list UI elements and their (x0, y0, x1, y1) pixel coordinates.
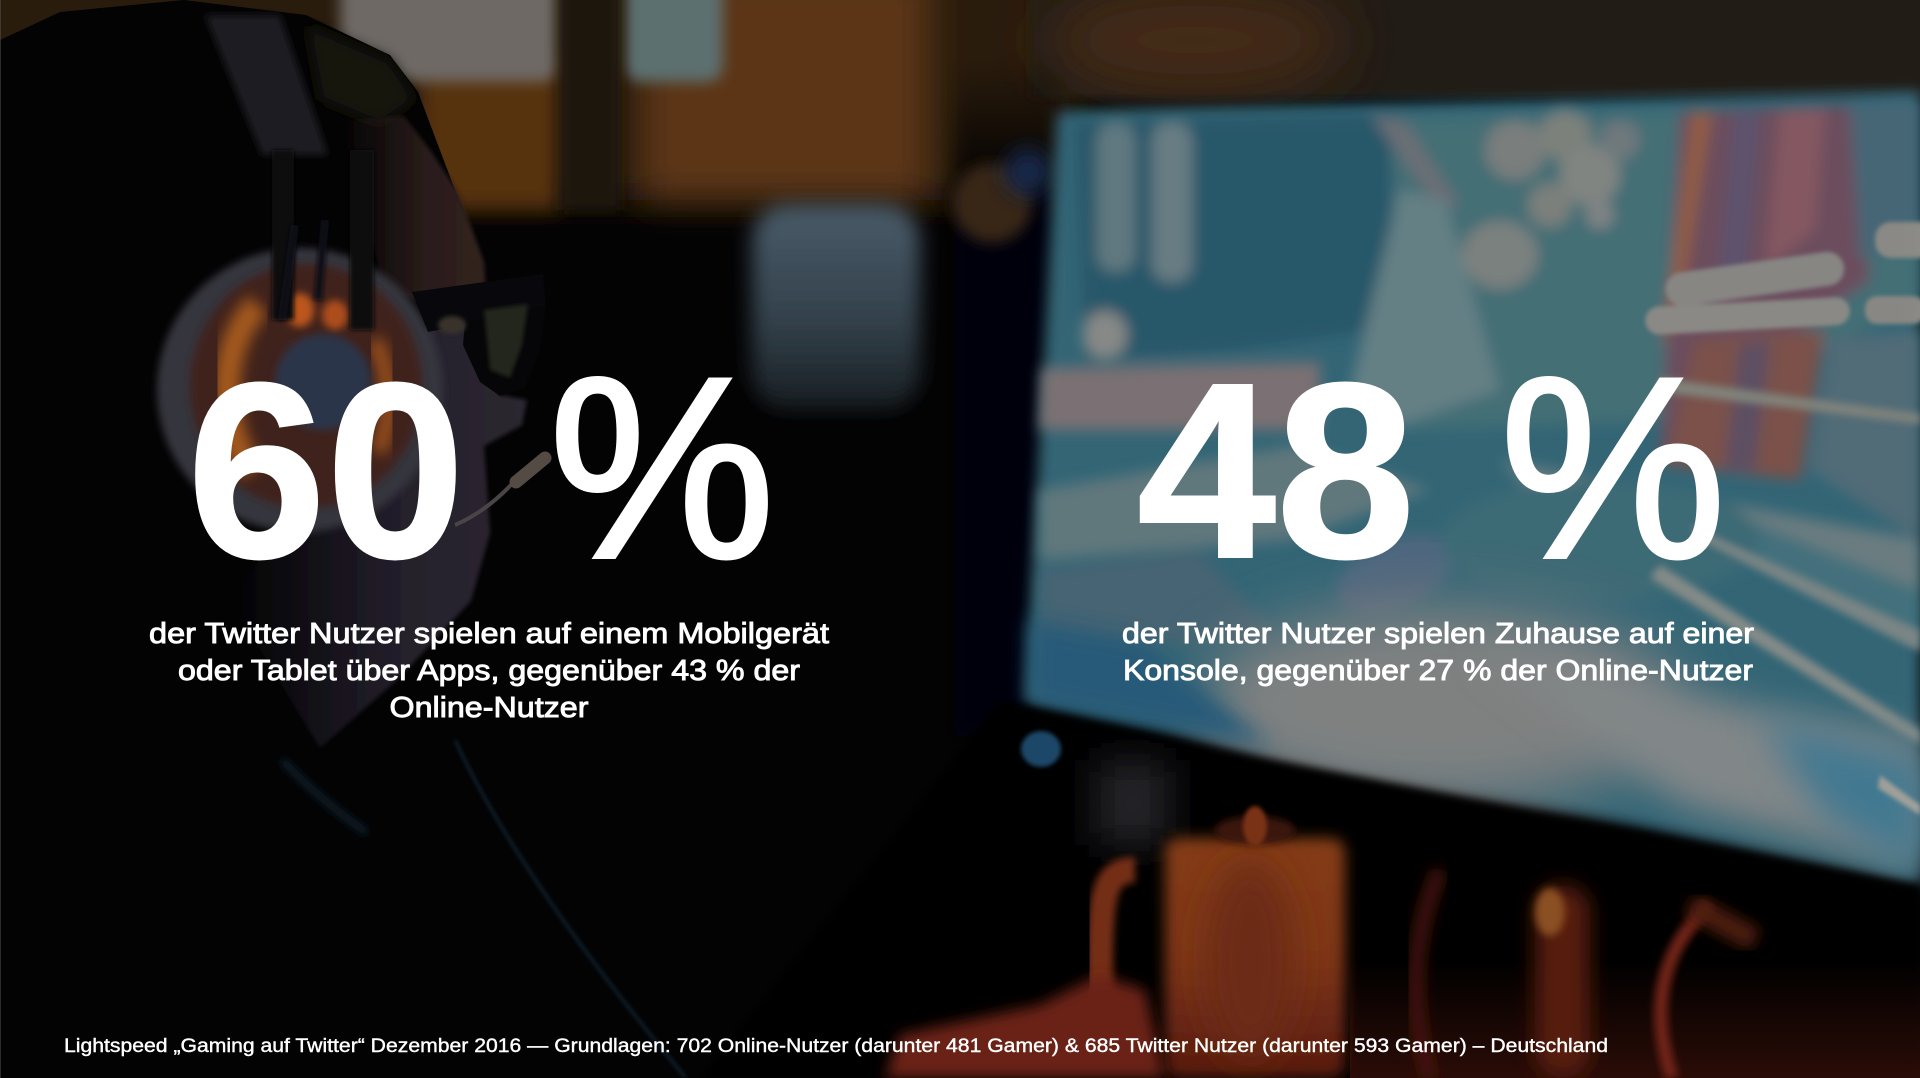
description: 48 %: Konsole, gegenüber 27 % der Online-Nutzer (1123, 655, 1753, 687)
room lights behind the gamer (0, 0, 1920, 740)
source footnote: Lightspeed „Gaming auf Twitter“ Dezember 2016 — Grundlagen: 702 Online-Nutzer (darunter 481 Gamer) & 685 Twitter Nutzer (darunter 593 Gamer) – Deutschland (64, 1035, 1608, 1057)
statistic: 60 % (187, 323, 775, 612)
hair (306, 24, 416, 125)
statistic: 60 %: % (549, 323, 775, 612)
monitor screen (1026, 92, 1920, 882)
description: 48 %: der Twitter Nutzer spielen Zuhause auf einer (1122, 618, 1754, 650)
grey stand detail (1095, 760, 1170, 845)
gamer silhouette (0, 0, 690, 1078)
headphone ear cup with glowing rings (157, 150, 443, 532)
statistic: 48 % (1137, 323, 1726, 612)
statistic: 60 %: 60 (187, 331, 465, 610)
description: 60 % (149, 618, 829, 724)
description: 60 %: Online-Nutzer (390, 692, 589, 724)
description: 60 %: der Twitter Nutzer spielen auf einem Mobilgerät (149, 618, 829, 650)
description: 60 %: oder Tablet über Apps, gegenüber 43 % der (178, 655, 800, 687)
monitor power LED (1021, 731, 1061, 767)
statistic: 48 %: 48 (1137, 331, 1415, 610)
mug and desk glow (885, 806, 1920, 1078)
headphone band (205, 15, 328, 155)
headset microphone boom (455, 458, 545, 525)
monitor bezel shadow (700, 700, 1920, 1078)
shoulder edge highlights (282, 760, 367, 833)
glasses (412, 274, 546, 396)
description: 48 % (1122, 618, 1754, 687)
statistic: 48 %: % (1500, 323, 1726, 612)
face (340, 116, 486, 302)
